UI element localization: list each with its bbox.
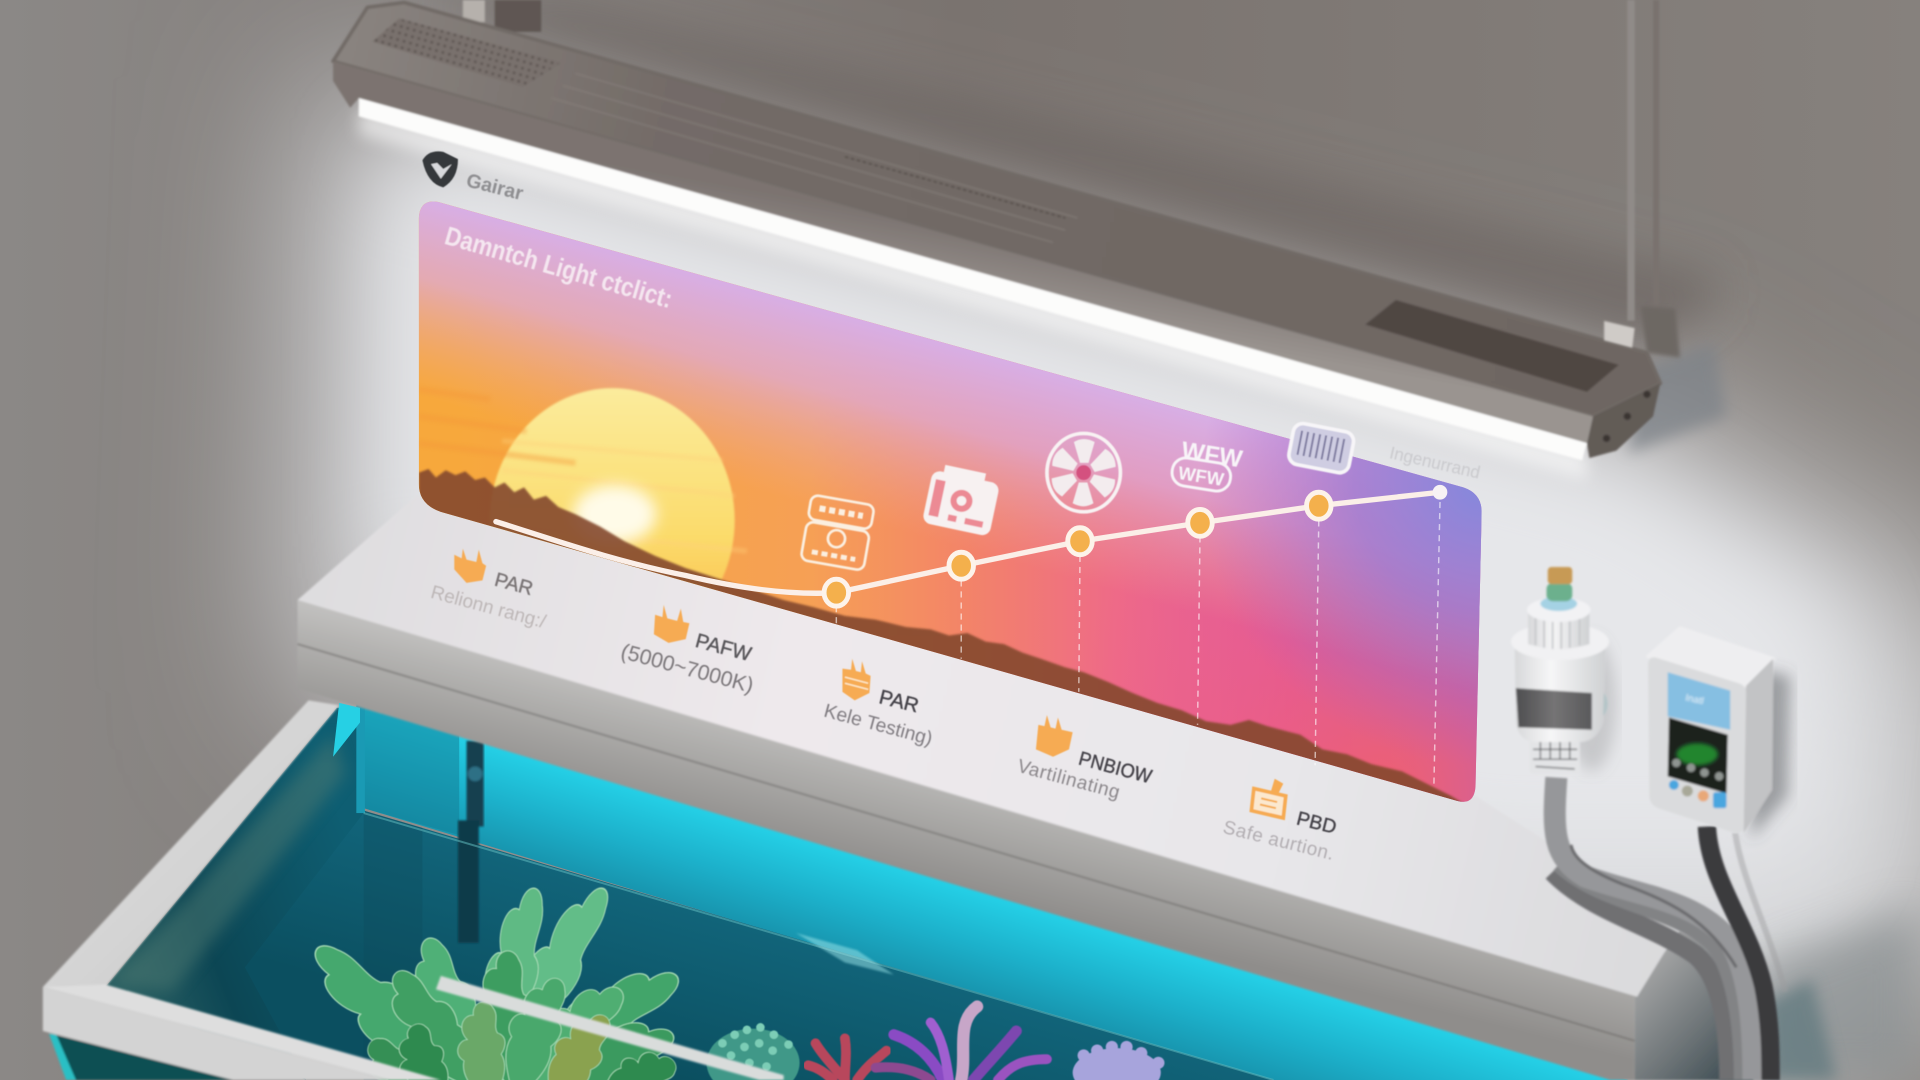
lamp glow on wall [359, 108, 1587, 480]
body [1515, 644, 1605, 742]
spec item: PAR reference range: Relionn rang:/ [429, 582, 549, 633]
tank rim [43, 700, 784, 1080]
icon: plug [654, 605, 689, 643]
threaded base [1529, 735, 1580, 774]
groove lines [551, 73, 1078, 242]
knob [1593, 692, 1608, 716]
spec item: PAFW colour temperature [618, 605, 756, 698]
spec item: PAR kelvin testing [822, 659, 935, 750]
plant: lilac coral [1073, 1041, 1164, 1080]
spec item: PNBIOW ventilation [1015, 715, 1155, 804]
spec item: PBD safe auction: Safe aurtion. [1221, 817, 1336, 865]
silhouette landscape [419, 469, 1476, 833]
wall controller box: Inatl [1684, 693, 1705, 707]
faint caption: Ingenurrand [1388, 442, 1482, 483]
spec item: PAR reference range: PAR [492, 569, 535, 600]
shelf front face [298, 600, 1635, 1080]
dark vent slot [1365, 300, 1619, 392]
cloud streaks [419, 389, 576, 463]
light curve chart [496, 485, 1447, 786]
wall controller box [1648, 628, 1790, 839]
spec item: PNBIOW ventilation: PNBIOW [1076, 748, 1155, 788]
dark band [1516, 688, 1592, 730]
plant: round teal coral [707, 1023, 800, 1080]
speaker mesh [372, 18, 561, 87]
shelf right side [1635, 931, 1753, 1080]
plant: purple coral [876, 1007, 1047, 1080]
icon: barcode pill [1287, 422, 1355, 474]
ribbed cap [1528, 610, 1589, 649]
right hanger rods [1604, 0, 1680, 358]
spec item: PAR kelvin testing: Kele Testing) [822, 700, 935, 750]
logo [422, 151, 526, 205]
icon: WFW badge: WFW [1177, 462, 1226, 490]
grey sensor cable bundle [1553, 872, 1729, 1080]
aquarium tank [105, 686, 1641, 1080]
top face [333, 2, 1660, 416]
spec item: PAFW colour temperature: PAFW [693, 630, 754, 666]
icon: document box [1251, 779, 1286, 818]
left rim [43, 700, 339, 987]
side face [1744, 659, 1773, 833]
cables [1553, 778, 1785, 1080]
blue label [1668, 672, 1730, 730]
dark controller cable [1707, 827, 1771, 1080]
water body [105, 811, 1273, 1080]
logo mark [422, 151, 458, 187]
back wall cyan glow [364, 686, 1641, 1080]
left glass pane [105, 708, 364, 1080]
icon: fan [1047, 433, 1120, 512]
icon: WFW badge: WFW [1179, 437, 1245, 474]
icon: light strip [800, 495, 875, 571]
sun core [573, 485, 656, 544]
icon: device module [922, 463, 1002, 537]
icon: WFW badge [1170, 437, 1245, 493]
icon: striped plug [842, 659, 871, 700]
dashed droplines [836, 502, 1440, 786]
collar [1511, 623, 1609, 660]
front rim top [43, 984, 441, 1080]
plant: green fronds [314, 886, 680, 1080]
mount bracket [463, 0, 485, 22]
top face [1648, 628, 1773, 686]
lower glass [49, 1033, 233, 1080]
front rim face [43, 987, 389, 1080]
shelf [298, 496, 1753, 1080]
sun [490, 388, 735, 653]
end cap [1587, 383, 1660, 458]
colored buttons [1669, 780, 1679, 790]
LCD screen [1668, 718, 1728, 793]
thin glass reflection bar [436, 976, 784, 1080]
water surface line [364, 813, 1273, 1080]
front face [333, 61, 1593, 443]
spec item: PAR kelvin testing: PAR [877, 686, 921, 717]
plant: red coral [808, 1038, 887, 1080]
front face [1648, 657, 1746, 833]
light strip [359, 98, 1587, 460]
icon: plug [454, 549, 486, 583]
data nodes [824, 492, 1331, 606]
gradient sunset panel [404, 184, 1506, 833]
spec item: PBD safe auction: PBD [1294, 808, 1339, 839]
spec item: PNBIOW ventilation: Vartilinating [1015, 756, 1123, 804]
heater tube [458, 741, 484, 943]
tip [1540, 596, 1577, 611]
curve line [496, 492, 1440, 593]
spec item: PBD safe auction [1221, 779, 1339, 865]
sensor probe [1511, 567, 1616, 774]
spec item: PAFW colour temperature: (5000~7000K) [618, 639, 756, 698]
LED light fixture [333, 0, 1660, 458]
spec item: PAR reference range [429, 549, 549, 633]
icon: plug [1036, 715, 1073, 757]
panel title: Damntch Light ctclict: [442, 223, 675, 314]
logo text: Gairar [464, 170, 526, 205]
shelf top [298, 496, 1680, 997]
